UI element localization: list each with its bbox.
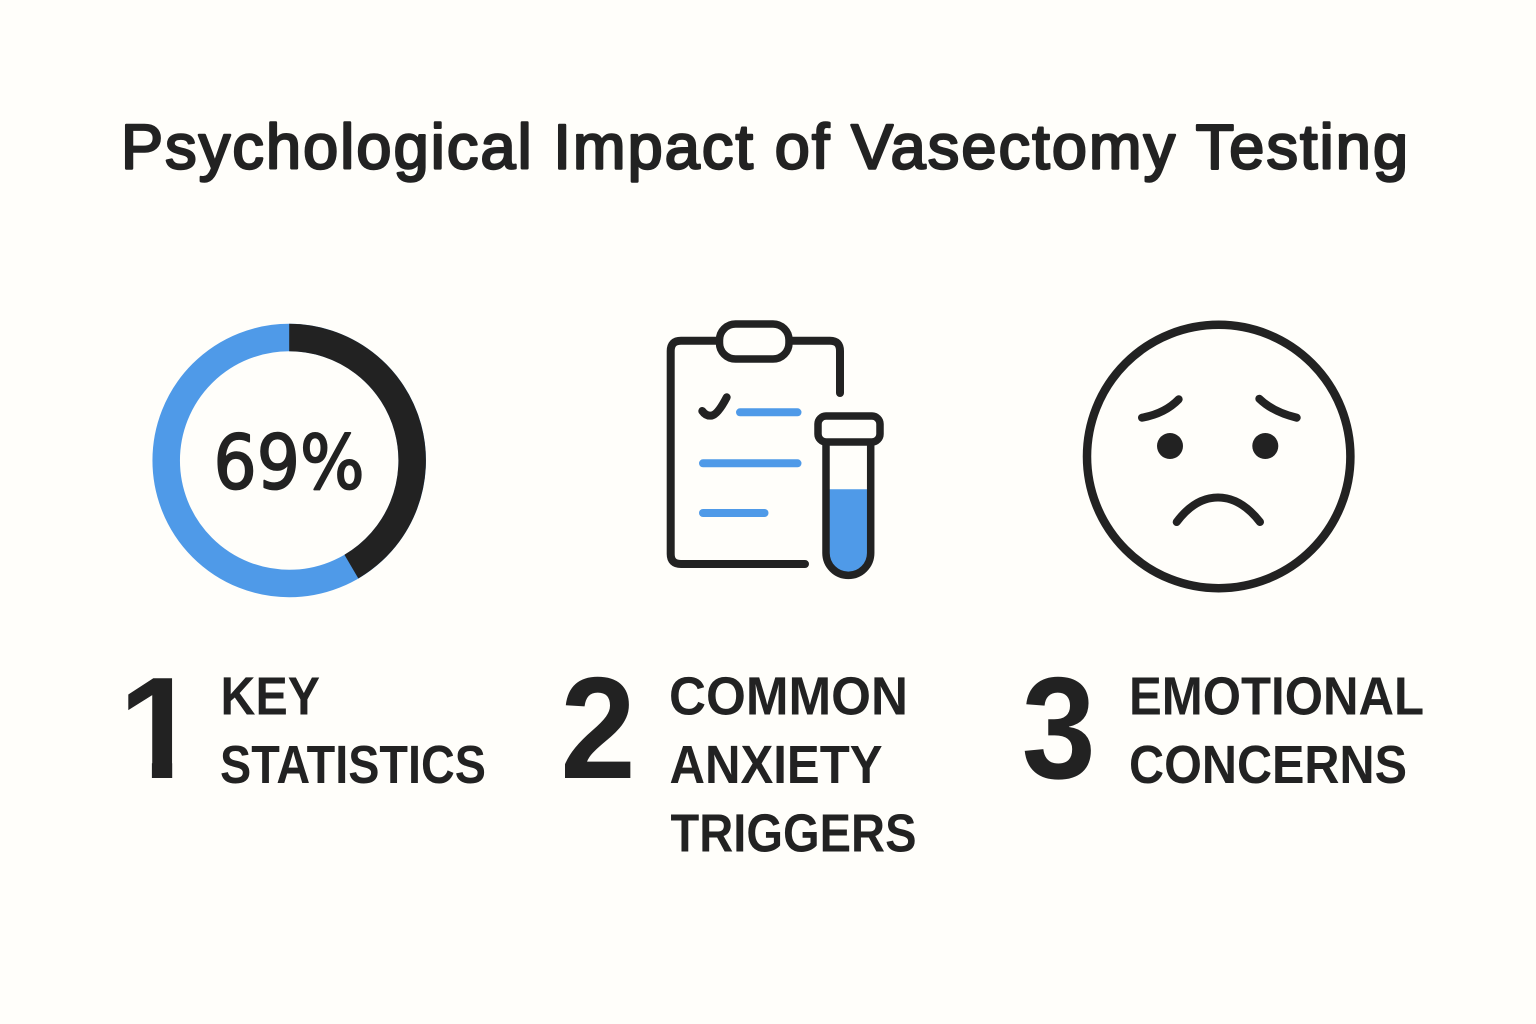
face outline — [1087, 325, 1350, 588]
label: key statistics — [220, 666, 486, 795]
mouth — [1177, 498, 1260, 522]
label: common anxiety triggers: TRIGGERS — [670, 804, 916, 864]
label: common anxiety triggers: ANXIETY — [670, 735, 882, 795]
number 1: 1 — [118, 647, 199, 809]
clipboard outline — [671, 341, 840, 564]
icon: worried face — [1087, 325, 1350, 588]
title: Psychological Impact of Vasectomy Testing — [121, 112, 1408, 182]
left eyebrow — [1142, 399, 1179, 418]
checklist lines — [703, 412, 798, 513]
label: key statistics: STATISTICS — [220, 735, 486, 795]
donut value: 69% — [214, 418, 364, 506]
test tube liquid — [828, 489, 869, 574]
clipboard clip — [720, 324, 789, 359]
label: emotional concerns: CONCERNS — [1129, 735, 1407, 795]
donut chart: 69% — [166, 338, 412, 584]
right eye — [1252, 433, 1278, 459]
label: emotional concerns: EMOTIONAL — [1129, 666, 1424, 726]
number 2: 2 — [560, 647, 636, 809]
label: key statistics: KEY — [220, 666, 320, 726]
left eye — [1157, 433, 1183, 459]
right eyebrow — [1259, 399, 1297, 418]
icon: clipboard and test tube — [671, 324, 880, 575]
test tube body — [826, 442, 871, 575]
label: common anxiety triggers: COMMON — [669, 666, 908, 726]
panel: key statistics — [118, 338, 486, 809]
panel: emotional concerns — [1022, 325, 1424, 809]
test tube cap — [818, 416, 880, 442]
panel: common anxiety triggers — [560, 324, 916, 864]
label: emotional concerns — [1129, 666, 1424, 795]
check mark — [702, 397, 727, 416]
label: common anxiety triggers — [669, 666, 916, 864]
number 3: 3 — [1022, 647, 1096, 809]
